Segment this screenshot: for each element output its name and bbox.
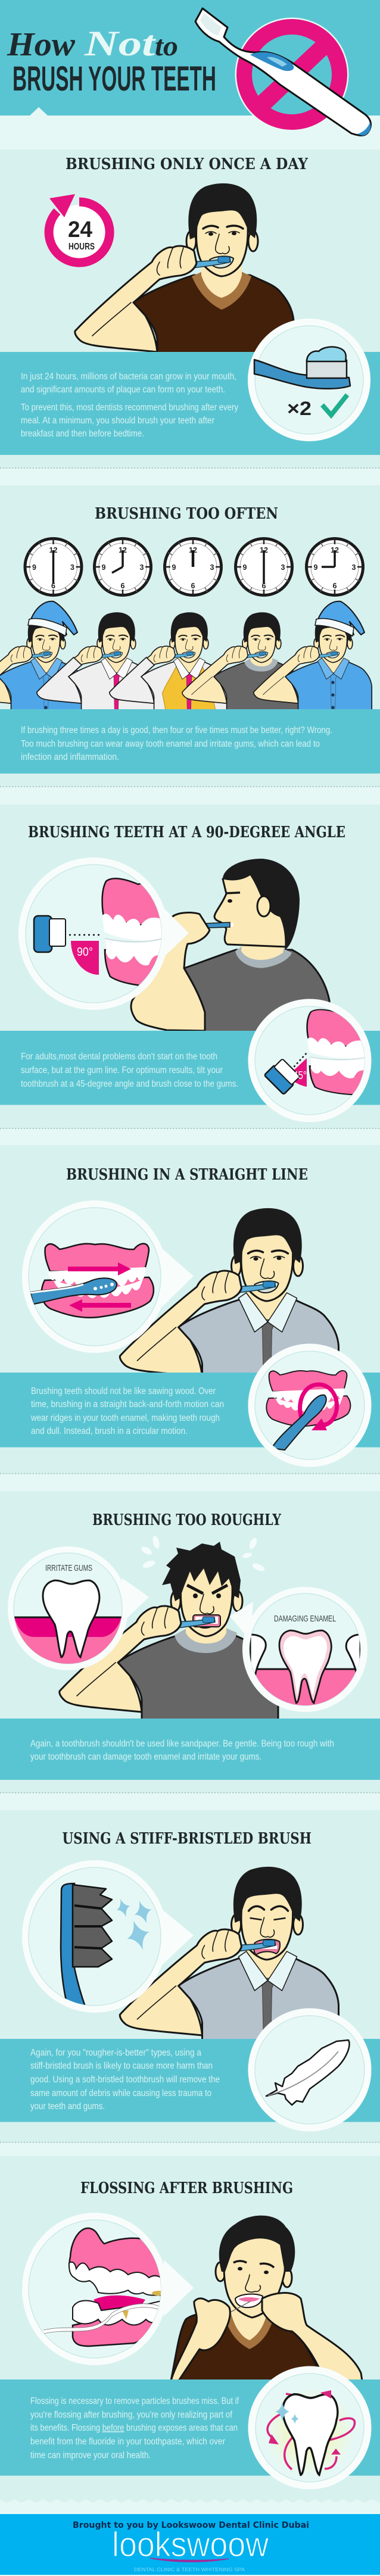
man in profile	[131, 859, 331, 1039]
callout: brush twice	[248, 319, 370, 441]
title: Brush your teeth: BRUSH YOUR TEETH	[13, 60, 216, 98]
body text	[21, 725, 332, 762]
icon: no-toothbrush sign	[195, 8, 371, 136]
body text: Again, a toothbrush shouldn't be used like sandpaper. Be gentle. Being too rough with	[30, 1739, 334, 1749]
text band	[0, 1719, 380, 1780]
man wincing	[120, 1867, 338, 2048]
callout: 45 degree: 45°	[293, 1069, 307, 1081]
heading: BRUSHING IN A STRAIGHT LINE	[66, 1166, 308, 1184]
header banner	[0, 0, 380, 149]
text band	[0, 709, 380, 774]
angry man	[60, 1542, 278, 1724]
sponsor line: Brought to you by Lookswoow Dental Clinic Dubai	[73, 2521, 309, 2530]
body text: your teeth and gums.	[30, 2101, 105, 2112]
clock 6:00 evening	[235, 538, 292, 595]
callout: healthy tooth	[248, 2366, 372, 2489]
panel: brushing too roughly	[0, 1511, 380, 1792]
footer	[0, 2514, 380, 2576]
body text	[30, 1739, 334, 1762]
clock 9:00	[306, 538, 363, 595]
icon: 24 hour timer	[49, 194, 110, 263]
callout: irritate gums: IRRITATE GUMS	[45, 1563, 92, 1573]
callout: back and forth	[22, 1200, 194, 1353]
callout: circular motion	[248, 1343, 372, 1467]
callout: 90 degree	[18, 857, 189, 1010]
panel: brushing too often	[0, 505, 380, 787]
panel: flossing after brushing	[0, 2179, 380, 2489]
callout: soft feather	[248, 2008, 372, 2132]
body text: and dull. Instead, brush in a circular motion.	[31, 1426, 188, 1436]
text band	[0, 1031, 380, 1105]
body text: infection and inflammation.	[21, 752, 119, 762]
body text: its benefits. Flossing before brushing exposes areas that can	[30, 2423, 238, 2433]
body text: For adults,most dental problems don't start on the tooth	[21, 1052, 217, 1062]
body text	[30, 2048, 220, 2112]
text band	[0, 352, 380, 455]
body text	[30, 2396, 239, 2460]
body text: Again, for you "rougher-is-better" types, using a	[30, 2048, 201, 2058]
body text: To prevent this, most dentists recommend brushing after every	[21, 403, 238, 413]
body text: stiff-bristled brush is likely to cause more harm than	[30, 2061, 213, 2071]
man in grey t-shirt	[182, 612, 300, 710]
body text: Too much brushing can wear away tooth enamel and irritate gums, which can lead to	[21, 739, 320, 749]
title: How Not to: Not	[84, 24, 157, 63]
heading: USING A STIFF-BRISTLED BRUSH	[62, 1830, 312, 1848]
panel: brushing in a straight line	[0, 1166, 380, 1473]
callout: brush twice: ×2	[287, 398, 312, 419]
panel: brushing at a 90-degree angle	[0, 824, 380, 1128]
text band	[0, 2039, 380, 2122]
body text	[21, 372, 238, 439]
body text: same amount of debris while causing less trauma to	[30, 2088, 211, 2098]
body text: Flossing is necessary to remove particles brushes miss. But if	[30, 2396, 239, 2406]
heading: BRUSHING ONLY ONCE A DAY	[66, 155, 308, 173]
callout: hard bristles	[22, 1860, 194, 2013]
sweat drops	[140, 1535, 266, 1573]
body text: time, brushing in a straight back-and-forth motion can	[31, 1399, 224, 1409]
heading: BRUSHING TOO OFTEN	[95, 505, 278, 523]
body text: you're flossing after brushing, you're only realizing part of	[30, 2410, 233, 2420]
body text: meal. At a minimum, you should brush your teeth after	[21, 416, 214, 426]
body text: benefit from the fluoride in your toothpaste, which over	[30, 2437, 225, 2447]
man with tie	[120, 1208, 338, 1389]
body text: toothbrush at a 45-degree angle and brush close to the gums.	[21, 1079, 238, 1089]
body text: time can improve your oral health.	[30, 2450, 151, 2460]
body text: breakfast and then before bedtime.	[21, 429, 144, 439]
panel: using a stiff-bristled brush	[0, 1830, 380, 2142]
body text: Brushing teeth should not be like sawing wood. Over	[31, 1386, 216, 1396]
icon: 24 hour timer: HOURS	[68, 242, 95, 252]
text band	[0, 2379, 380, 2476]
logo wordmark: lookswoow	[112, 2525, 269, 2564]
body text: surface, but at the gum line. For optimum results, tilt your	[21, 1065, 223, 1075]
body text: and significant amounts of plaque can form on your teeth.	[21, 385, 225, 395]
panel: brushing only once a day	[0, 155, 380, 468]
callout: damaging enamel	[230, 1587, 367, 1712]
clock 12:00	[164, 538, 222, 595]
clocks	[25, 538, 363, 595]
man flossing	[171, 2216, 362, 2381]
body text	[21, 1052, 238, 1089]
body text: wear ridges in your tooth enamel, making teeth rough	[30, 1413, 220, 1423]
body text: If brushing three times a day is good, then four or five times must be better, right? Wrong.	[21, 725, 332, 735]
icon: 24 hour timer: 24	[68, 217, 92, 242]
nightcap left	[28, 601, 77, 636]
body text: your toothbrush can damage tooth enamel and irritate your gums.	[30, 1752, 261, 1762]
man in pajamas morning	[0, 612, 85, 710]
man brushing	[75, 183, 294, 364]
title: How Not to	[7, 24, 178, 63]
zigzag divider	[0, 2499, 380, 2514]
man in yellow vest	[110, 612, 228, 710]
logo swoosh	[150, 2558, 229, 2562]
clock 6:00	[25, 538, 82, 595]
callout: 90 degree: 90°	[77, 946, 93, 959]
body text: good. Using a soft-bristled toothbrush will remove the	[30, 2075, 220, 2085]
logo tagline: DENTAL CLINIC & TEETH WHITENING SPA	[134, 2566, 245, 2572]
callout: 45 degree	[248, 999, 378, 1122]
callout: floss and plaque	[22, 2213, 194, 2365]
clock 8:00	[94, 538, 151, 595]
body text	[30, 1386, 224, 1436]
man in dress shirt	[37, 612, 155, 710]
heading: BRUSHING TOO ROUGHLY	[92, 1511, 281, 1529]
title: How Not to: to	[155, 30, 178, 62]
heading: FLOSSING AFTER BRUSHING	[80, 2179, 293, 2197]
nightcap right	[315, 601, 365, 636]
callout: irritate gums	[8, 1546, 149, 1670]
title: How Not to: How	[7, 26, 76, 63]
callout: damaging enamel: DAMAGING ENAMEL	[274, 1614, 336, 1624]
text band	[0, 1373, 380, 1447]
man in pajamas night	[254, 612, 372, 710]
body text: In just 24 hours, millions of bacteria can grow in your mouth,	[21, 372, 236, 382]
